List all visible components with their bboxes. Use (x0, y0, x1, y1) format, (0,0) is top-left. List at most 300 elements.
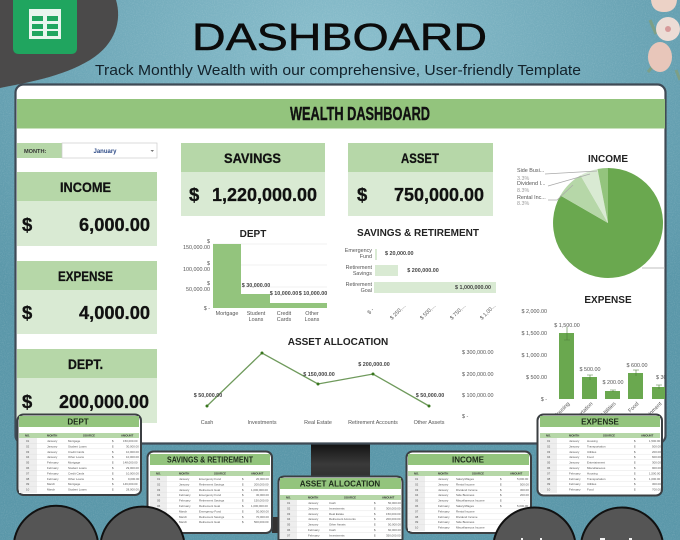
thumbnail: dept table: March (47, 488, 55, 492)
thumbnail: asset allocation table: Investments (329, 506, 345, 510)
chart: dept bars: Loans (249, 317, 264, 323)
thumbnail: asset allocation table: 200,000.00 (386, 517, 401, 521)
chart: expense bars: $ 600.00 (627, 363, 647, 369)
chart: expense bars: $ 2,000.00 (522, 309, 547, 315)
thumbnail: dept table: $ (112, 461, 114, 465)
thumbnail: expense table: 900.00 (652, 466, 661, 470)
card: income: 6,000.00 (79, 214, 150, 235)
thumbnail: asset allocation table: 300,000.00 (386, 506, 401, 510)
thumbnail: expense table: 1,500.00 (649, 471, 661, 475)
subtitle: Track Monthly Wealth with our comprehensive, User-friendly Template (95, 62, 581, 79)
thumbnail: income table: February (438, 504, 450, 508)
thumbnail: expense table: Utilities (587, 450, 597, 454)
thumbnail: savings and retirement table: 500,000.00 (254, 520, 269, 524)
thumbnail: dept table: January (47, 450, 58, 454)
thumbnail: expense table: AMOUNT (641, 434, 654, 438)
chart: expense bars: $ 1,500.00 (554, 323, 580, 329)
thumbnail: expense table: Transportation (587, 477, 606, 481)
thumbnail: expense table: 300.00 (652, 482, 661, 486)
thumbnail: dept table: Student Loans (68, 488, 87, 492)
thumbnail: dept table: Credit Cards (68, 450, 85, 454)
corner blob (0, 0, 118, 88)
thumbnail: savings and retirement table (148, 452, 272, 533)
thumbnail: expense table: $ (634, 482, 636, 486)
thumbnail: savings and retirement table: 06 (157, 504, 161, 508)
thumbnail: dept table: 29,000.00 (126, 466, 139, 470)
chart: asset allocation line (194, 337, 493, 426)
thumbnail: asset allocation table: 50,000.00 (388, 523, 401, 527)
thumbnail: savings and retirement table: 1,000,000.00 (251, 488, 268, 492)
thumbnail: savings and retirement table: 09 (157, 520, 161, 524)
card: asset (348, 143, 493, 216)
thumbnail: expense table: MONTH (569, 434, 579, 438)
thumbnail: savings and retirement table: SAVINGS & RETIREMENT (167, 456, 253, 464)
chart: income pie: Side Busi... (517, 168, 544, 174)
thumbnail: savings and retirement table: $ (242, 493, 244, 497)
card: expense: $ (22, 302, 33, 323)
thumbnail: income table: 500.00 (520, 482, 529, 486)
thumbnail: expense table: $ (634, 439, 636, 443)
chart: asset allocation line: $ 50,000.00 (416, 393, 444, 399)
card: dept (17, 349, 157, 423)
thumbnail: dept table: $ (112, 466, 114, 470)
thumbnail: income table: SOURCE (472, 472, 484, 476)
chart: expense bars: $ - (541, 397, 547, 403)
thumbnail: dept table: Mortgage (68, 482, 81, 486)
thumbnail: expense table: Utilities (587, 482, 597, 486)
thumbnail: savings and retirement table: Retirement Goal (199, 488, 220, 492)
thumbnail: asset allocation table: SOURCE (344, 496, 356, 500)
card: expense (17, 261, 157, 334)
thumbnail: savings and retirement table: February (179, 493, 191, 497)
thumbnail: dept table: 08 (26, 477, 30, 481)
thumbnail: savings and retirement table: Retirement Goal (199, 520, 220, 524)
card: savings (181, 143, 325, 216)
thumbnail: income table: January (438, 499, 449, 503)
thumbnail: dept table: $ (112, 477, 114, 481)
chart: savings and retirement bars: $ 200,000.00 (407, 268, 439, 274)
chart: asset allocation line: $ 100,000.00 (462, 393, 493, 399)
chart: expense bars: Food (627, 401, 640, 414)
thumbnail: savings and retirement table: 05 (157, 499, 161, 503)
thumbnail: expense table: $ (634, 444, 636, 448)
thumbnail: dept table: 30,000.00 (126, 444, 139, 448)
thumbnail: savings and retirement table: January (179, 482, 190, 486)
chart: expense bars: $ 300.00 (656, 375, 677, 381)
thumbnail: asset allocation table: 03 (287, 512, 291, 516)
chart: asset allocation line: $ 300,000.00 (462, 350, 493, 356)
thumbnail: expense table: 03 (547, 450, 551, 454)
thumbnail: dept table: $ (112, 439, 114, 443)
thumbnail: income table: 01 (415, 477, 419, 481)
thumbnail: asset allocation table (278, 476, 402, 540)
chart: dept bars: $ 10,000.00 (299, 291, 327, 297)
chart: savings and retirement bars: SAVINGS & RETIREMENT (357, 228, 479, 239)
thumbnail: income table: January (438, 493, 449, 497)
thumbnail: income table: 200.00 (520, 493, 529, 497)
thumbnail: savings and retirement table: NO. (156, 472, 161, 476)
thumbnail: expense table: 02 (547, 444, 551, 448)
card: savings: 1,220,000.00 (212, 184, 317, 205)
thumbnail: dept table: 10,000.00 (126, 455, 139, 459)
month selector: MONTH: (24, 149, 47, 155)
thumbnail: expense table: 08 (547, 477, 551, 481)
chart: asset allocation line: ASSET ALLOCATION (288, 337, 388, 348)
chart: savings and retirement bars: Goal (361, 288, 372, 294)
thumbnail: savings and retirement table: January (179, 477, 190, 481)
thumbnail: income table: 03 (415, 488, 419, 492)
chart: asset allocation line: $ 50,000.00 (194, 393, 222, 399)
thumbnail: savings and retirement table: January (179, 488, 190, 492)
thumbnail: dept table: 06 (26, 466, 30, 470)
thumbnail: asset allocation table: January (308, 501, 319, 505)
thumbnail: expense table: 01 (547, 439, 551, 443)
thumbnail: expense table: 07 (547, 471, 551, 475)
thumbnail: income table: $ (500, 493, 502, 497)
thumbnail: dept table: 148,000.00 (123, 461, 138, 465)
chart: dept bars: $ (207, 239, 210, 245)
card: income: $ (22, 214, 33, 235)
thumbnail: savings and retirement table: 03 (157, 488, 161, 492)
thumbnail: dept table: February (47, 466, 59, 470)
thumbnail: dept table: Credit Cards (68, 471, 85, 475)
thumbnail: dept table: Other Loans (68, 455, 84, 459)
thumbnail: income table: MONTH (438, 472, 448, 476)
chart: expense bars: $ 500.00 (580, 367, 600, 373)
thumbnail: income table: 02 (415, 482, 419, 486)
chart: income pie: 8.3% (517, 201, 529, 207)
thumbnail: asset allocation table: 60,000.00 (388, 528, 401, 532)
thumbnail: asset allocation table: January (308, 523, 319, 527)
thumbnail: expense table: EXPENSE (581, 418, 620, 426)
thumbnail: dept table: $ (112, 455, 114, 459)
card: expense: EXPENSE (58, 269, 113, 284)
card: income: INCOME (60, 180, 111, 195)
chart: expense bars: $ 1,000.00 (522, 353, 547, 359)
thumbnail: asset allocation table: February (308, 528, 320, 532)
thumbnail: dept table: 07 (26, 471, 30, 475)
chart: dept bars: DEPT (240, 229, 266, 240)
thumbnail: asset allocation table: $ (374, 523, 376, 527)
chart: dept bars: Other (305, 311, 319, 317)
chart: asset allocation line: Real Estate (304, 420, 332, 426)
chart: dept bars: $ (207, 261, 210, 267)
chart: asset allocation line: Cash (201, 420, 213, 426)
chart: income pie: 8.3% (517, 188, 529, 194)
month selector: January (93, 149, 117, 155)
thumbnail: income table: 06 (415, 504, 419, 508)
thumbnail: savings and retirement table: March (179, 520, 187, 524)
chart: savings and retirement bars (345, 228, 497, 321)
thumbnail: asset allocation table: 150,000.00 (386, 512, 401, 516)
thumbnail: dept table: $ (112, 482, 114, 486)
thumbnail: savings and retirement table: $ (242, 520, 244, 524)
title: DASHBOARD (192, 17, 487, 59)
thumbnail: savings and retirement table: $ (242, 477, 244, 481)
thumbnail: expense table: $ (634, 461, 636, 465)
chart: expense bars: Housing (553, 401, 571, 419)
thumbnail: asset allocation table: Other Assets (329, 523, 346, 527)
thumbnail: savings and retirement table: 30,000.00 (256, 493, 269, 497)
thumbnail: expense table: January (569, 466, 580, 470)
thumbnail: savings and retirement table: 07 (157, 509, 161, 513)
thumbnail: asset allocation table: Cash (329, 528, 336, 532)
flower decoration (648, 0, 680, 80)
chart: dept bars: $ - (204, 306, 210, 312)
thumbnail: dept table: January (47, 455, 58, 459)
thumbnail: savings and retirement table: 200,000.00 (254, 482, 269, 486)
chart: savings and retirement bars: Retirement (346, 265, 372, 271)
chart: dept bars: 100,000.00 (183, 267, 210, 273)
thumbnail: savings and retirement table: 02 (157, 482, 161, 486)
thumbnail: expense table: 1,000.00 (649, 477, 661, 481)
chart: savings and retirement bars: Retirement (346, 282, 372, 288)
thumbnail: income table: Miscellaneous Income (456, 499, 485, 503)
chart: asset allocation line: $ 200,000.00 (462, 372, 493, 378)
thumbnail: savings and retirement table: February (179, 499, 191, 503)
chart: expense bars: $ 200.00 (603, 380, 623, 386)
thumbnail: dept table: 10,000.00 (126, 471, 139, 475)
chart: asset allocation line: Retirement Accounts (348, 420, 398, 426)
thumbnail: expense table: $ (634, 466, 636, 470)
chart: expense bars (522, 296, 665, 414)
card: expense: 4,000.00 (79, 302, 150, 323)
thumbnail: savings and retirement table: March (179, 509, 187, 513)
thumbnail: dept table: 01 (26, 439, 30, 443)
thumbnail: expense table: 05 (547, 461, 551, 465)
dashboard header: WEALTH DASHBOARD (290, 104, 430, 124)
feature circles (14, 506, 663, 540)
thumbnail: dept table: February (47, 471, 59, 475)
thumbnail: savings and retirement table: 01 (157, 477, 161, 481)
thumbnail: dept table: SOURCE (83, 434, 95, 438)
chart: expense bars: $ 500.00 (526, 375, 547, 381)
thumbnail: income table: 04 (415, 493, 419, 497)
chart: expense bars: $ 1,500.00 (522, 331, 547, 337)
thumbnail: dept table: 10,000.00 (126, 450, 139, 454)
thumbnail: income table: Salary/Wages (456, 504, 474, 508)
thumbnail: income table: 08 (415, 515, 419, 519)
circle text fragments (521, 538, 632, 540)
thumbnail: expense table: January (569, 461, 580, 465)
chart: dept bars: 150,000.00 (183, 245, 210, 251)
thumbnail: savings and retirement table: $ (242, 499, 244, 503)
thumbnail: asset allocation table: ASSET ALLOCATION (300, 480, 380, 488)
thumbnail: income table: 5,000.00 (517, 477, 529, 481)
thumbnail: asset allocation table: $ (374, 517, 376, 521)
thumbnail: dept table: 150,000.00 (123, 439, 138, 443)
chart: dept bars: $ 30,000.00 (242, 283, 270, 289)
chart: income pie: Dividend I... (517, 181, 545, 187)
thumbnail: income table: 300.00 (520, 488, 529, 492)
thumbnail: dept table: Student Loans (68, 466, 87, 470)
card: asset: $ (357, 184, 368, 205)
thumbnail: asset allocation table: $ (374, 512, 376, 516)
thumbnail: expense table: $ (634, 455, 636, 459)
thumbnail: income table: Dividend Income (456, 515, 478, 519)
thumbnail: expense table: Entertainment (587, 461, 605, 465)
thumbnail: expense table: 600.00 (652, 455, 661, 459)
chart: savings and retirement bars: $ - (367, 307, 376, 316)
card: savings: $ (189, 184, 200, 205)
thumbnail: expense table: January (569, 455, 580, 459)
thumbnail: expense table: $ (634, 488, 636, 492)
thumbnail: income table: $ (500, 488, 502, 492)
chart: asset allocation line: Other Assets (414, 420, 445, 426)
thumbnail: asset allocation table: 07 (287, 533, 291, 537)
thumbnail: dept table: Mortgage (68, 461, 81, 465)
thumbnail: savings and retirement table: $ (242, 509, 244, 513)
thumbnail: asset allocation table: 05 (287, 523, 291, 527)
thumbnail: expense table: February (569, 482, 581, 486)
thumbnail: savings and retirement table: Retirement Savings (199, 482, 225, 486)
thumbnail: expense table: NO. (546, 434, 551, 438)
thumbnail: dept table: 10 (26, 488, 30, 492)
icon: spreadsheet logo (13, 0, 77, 54)
thumbnail: dept table: January (47, 439, 58, 443)
chart: dept bars: $ 10,000.00 (270, 291, 298, 297)
thumbnail: expense table: 500.00 (652, 444, 661, 448)
thumbnail: expense table: January (569, 450, 580, 454)
thumbnail: expense table: SOURCE (603, 434, 615, 438)
thumbnail: asset allocation table: 04 (287, 517, 291, 521)
thumbnail: income table: February (438, 520, 450, 524)
thumbnail: expense table: Housing (587, 471, 598, 475)
thumbnail: savings and retirement table: 1,000,000.00 (251, 504, 268, 508)
thumbnail: asset allocation table: Investments (329, 533, 345, 537)
thumbnail: dept table: Mortgage (68, 439, 81, 443)
thumbnail: asset allocation table: $ (374, 506, 376, 510)
thumbnail: income table: AMOUNT (510, 472, 523, 476)
thumbnail: income table: 05 (415, 499, 419, 503)
thumbnail: savings and retirement table: Emergency Fund (199, 493, 221, 497)
thumbnail: asset allocation table: Real Estate (329, 512, 344, 516)
thumbnail: asset allocation table: Cash (329, 501, 336, 505)
thumbnail: income table: 10 (415, 526, 419, 530)
thumbnail: income table: 07 (415, 509, 419, 513)
thumbnail: savings and retirement table: February (179, 504, 191, 508)
thumbnail: savings and retirement table: 150,000.00 (254, 499, 269, 503)
thumbnail: income table: 09 (415, 520, 419, 524)
card: asset: ASSET (401, 151, 440, 166)
thumbnail: asset allocation table: NO. (286, 496, 291, 500)
thumbnail: savings and retirement table: Retirement Savings (199, 499, 225, 503)
thumbnail: savings and retirement table: $ (242, 482, 244, 486)
thumbnail: expense table: Food (587, 488, 594, 492)
chart: asset allocation line: $ 150,000.00 (303, 372, 335, 378)
card: dept: DEPT. (68, 357, 103, 372)
chart: dept bars: Loans (305, 317, 320, 323)
thumbnail: dept table: January (47, 444, 58, 448)
thumbnail: dept table: NO. (25, 434, 30, 438)
thumbnail: income table: Side Business (456, 493, 475, 497)
chart: savings and retirement bars: Fund (360, 254, 372, 260)
thumbnail: dept table: $ (112, 488, 114, 492)
thumbnail: savings and retirement table: 50,000.00 (256, 509, 269, 513)
thumbnail: expense table: February (569, 488, 581, 492)
thumbnail: income table: January (438, 488, 449, 492)
card: dept: 200,000.00 (59, 391, 149, 412)
thumbnail: savings and retirement table: Emergency Fund (199, 477, 221, 481)
thumbnail: dept table: 9,000.00 (128, 477, 140, 481)
thumbnail: dept table: 03 (26, 450, 30, 454)
thumbnail: asset allocation table: Retirement Accounts (329, 517, 356, 521)
thumbnail: income table: INCOME (452, 456, 485, 464)
thumbnail: savings and retirement table: 20,000.00 (256, 477, 269, 481)
thumbnail: dept table: Other Loans (68, 477, 84, 481)
thumbnail: asset allocation table: AMOUNT (382, 496, 395, 500)
thumbnail: expense table: 09 (547, 482, 551, 486)
thumbnail: income table: Rental Income (456, 482, 475, 486)
chart: savings and retirement bars: $ 20,000.00 (385, 251, 413, 257)
thumbnail: dept table: DEPT (67, 418, 89, 426)
thumbnail: income table: Side Business (456, 520, 475, 524)
thumbnail: asset allocation table: MONTH (308, 496, 318, 500)
thumbnail: dept table: February (47, 461, 59, 465)
thumbnail: expense table: Food (587, 455, 594, 459)
thumbnail: savings and retirement table: Retirement Goal (199, 504, 220, 508)
thumbnail: income table: $ (500, 477, 502, 481)
thumbnail: asset allocation table: 01 (287, 501, 291, 505)
thumbnail: asset allocation table: $ (374, 533, 376, 537)
thumbnail: savings and retirement table: 04 (157, 493, 161, 497)
thumbnail: dept table: 146,000.00 (123, 482, 138, 486)
thumbnail: income table: Dividend Income (456, 488, 478, 492)
thumbnail: income table: $ (500, 499, 502, 503)
thumbnail: savings and retirement table: MONTH (179, 472, 189, 476)
thumbnail: expense table: Transportation (587, 444, 606, 448)
thumbnail: dept table: 02 (26, 444, 30, 448)
chart: dept bars: Mortgage (216, 311, 238, 317)
monitor stand (272, 443, 370, 533)
thumbnail: savings and retirement table: Retirement Savings (199, 515, 225, 519)
thumbnail: expense table: January (569, 444, 580, 448)
thumbnail: income table: Salary/Wages (456, 477, 474, 481)
chart: dept bars: Credit (277, 311, 292, 317)
thumbnail: expense table: Housing (587, 439, 598, 443)
chart: expense bars: Entertainment (635, 401, 664, 429)
thumbnail: asset allocation table: January (308, 512, 319, 516)
chart: income pie (517, 154, 665, 278)
chart: expense bars: EXPENSE (584, 295, 632, 306)
thumbnail: expense table: Miscellaneous (587, 466, 606, 470)
chart: dept bars: Student (247, 311, 266, 317)
thumbnail: income table: - (524, 499, 525, 503)
card: asset: 750,000.00 (394, 184, 484, 205)
thumbnail: dept table: March (47, 482, 55, 486)
thumbnail: asset allocation table: $ (374, 501, 376, 505)
thumbnail: dept table: Student Loans (68, 444, 87, 448)
thumbnail: expense table: 04 (547, 455, 551, 459)
chart: dept bars (183, 229, 327, 323)
card: dept: $ (22, 391, 33, 412)
chart: dept bars: $ (207, 281, 210, 287)
thumbnail: expense table: 700.00 (652, 488, 661, 492)
thumbnail: asset allocation table: $ (374, 528, 376, 532)
chart: income pie: 3.3% (517, 176, 529, 182)
thumbnail: income table: January (438, 477, 449, 481)
thumbnail: expense table: February (569, 477, 581, 481)
thumbnail: expense table: $ (634, 471, 636, 475)
month selector (17, 143, 157, 158)
thumbnail: savings and retirement table: SOURCE (214, 472, 226, 476)
thumbnail: savings and retirement table: AMOUNT (251, 472, 264, 476)
thumbnail: income table (406, 452, 531, 533)
thumbnail: expense table: February (569, 471, 581, 475)
thumbnail: expense table: $ (634, 477, 636, 481)
thumbnail: asset allocation table: 02 (287, 506, 291, 510)
thumbnail: income table: February (438, 515, 450, 519)
